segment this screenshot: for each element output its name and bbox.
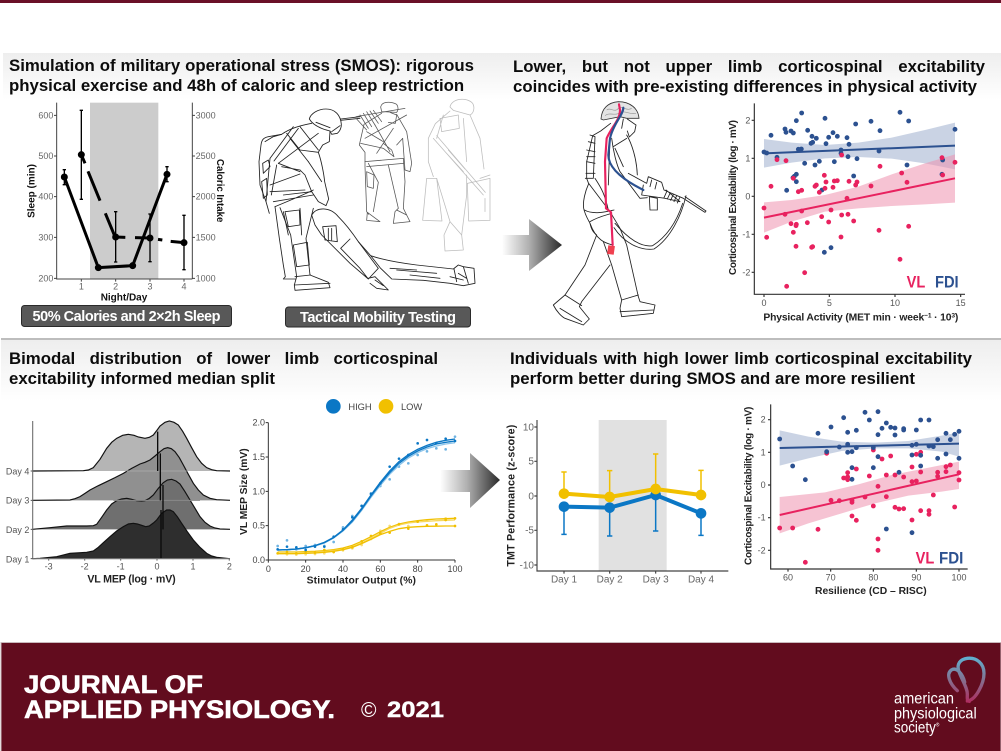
chart: excitability vs physical activity: 0 xyxy=(745,191,750,201)
chart: excitability vs physical activity: 15 xyxy=(956,298,966,308)
chart: excitability vs resilience: 90 xyxy=(911,573,921,583)
journal name: JOURNAL OF xyxy=(24,671,203,699)
chart: stimulus response curves: 1.0 xyxy=(252,486,265,496)
arrow: to right panel xyxy=(502,219,562,271)
footer panel xyxy=(1,642,1001,751)
chart: ridgeline of VL MEP: 2 xyxy=(227,561,232,571)
chart: ridgeline of VL MEP: Day 2 xyxy=(6,525,29,535)
chart: TMT performance: 0 xyxy=(528,491,534,502)
illustration: soldier carrying jerry cans xyxy=(423,99,490,251)
chart: excitability vs resilience: 70 xyxy=(826,573,836,583)
chart: stimulus response curves: 80 xyxy=(413,564,423,574)
chart: excitability vs physical activity: 2 xyxy=(745,115,750,125)
illustration: soldier standing xyxy=(356,102,412,223)
chart: ridgeline of VL MEP: -1 xyxy=(117,561,125,571)
chart: stimulus response curves: 60 xyxy=(375,564,385,574)
chart: stimulus response curves: 1.5 xyxy=(252,452,265,462)
heading: individuals with high excitability xyxy=(510,349,972,388)
chart: sleep and caloric intake: 2500 xyxy=(196,151,216,161)
copyright: 2021 xyxy=(387,697,444,722)
label: tactical mobility testing: Tactical Mobility Testing xyxy=(300,310,456,326)
chart: stimulus response curves: 0.0 xyxy=(252,555,265,565)
chart: ridgeline of VL MEP: Day 1 xyxy=(6,554,29,564)
chart: excitability vs physical activity: FDI xyxy=(935,273,959,292)
society logo: society xyxy=(894,720,942,737)
chart: excitability vs resilience: -1 xyxy=(758,513,766,523)
chart: stimulus response curves: 40 xyxy=(338,564,348,574)
chart: sleep and caloric intake xyxy=(27,103,225,303)
society logo: ® xyxy=(936,722,939,729)
points: FDI xyxy=(780,412,959,533)
chart: TMT performance: -5 xyxy=(525,526,534,537)
copyright: © xyxy=(361,699,377,722)
chart: TMT performance: 10 xyxy=(523,422,534,433)
chart: sleep and caloric intake: Sleep (min) xyxy=(27,164,38,218)
heading: bimodal distribution: Bimodal distribution of lower limb corticospinal xyxy=(9,349,438,368)
chart: excitability vs physical activity: -1 xyxy=(742,229,750,239)
chart: ridgeline of VL MEP xyxy=(6,421,232,586)
society logo xyxy=(894,658,984,737)
chart: sleep and caloric intake: 300 xyxy=(38,232,53,242)
journal name xyxy=(24,671,335,724)
legend: LOW xyxy=(401,402,422,412)
chart: stimulus response curves: 2.0 xyxy=(252,418,265,428)
journal name: APPLIED PHYSIOLOGY. xyxy=(24,696,335,724)
chart: sleep and caloric intake: 600 xyxy=(38,110,53,120)
legend: HIGH xyxy=(348,402,372,412)
chart: excitability vs physical activity: · 10 xyxy=(931,313,952,324)
chart: excitability vs resilience: 80 xyxy=(868,573,878,583)
chart: TMT performance: Day 4 xyxy=(688,575,714,586)
section divider and band: bottom xyxy=(1,338,1001,401)
points: VL xyxy=(764,155,955,286)
heading: individuals with high excitability: perform better during SMOS and are more resilient xyxy=(510,369,915,388)
chart: sleep and caloric intake: Night/Day xyxy=(101,292,148,303)
chart: excitability vs physical activity xyxy=(728,103,966,324)
chart: excitability vs resilience xyxy=(744,404,968,597)
heading: lower limb excitability xyxy=(513,57,985,96)
illustration: soldier walking with corticospinal tract xyxy=(553,102,706,325)
illustration: soldier dragging casualty xyxy=(259,109,475,290)
chart: excitability vs physical activity: Corticospinal Excitability (log · mV) xyxy=(728,120,739,275)
chart: sleep and caloric intake: 3 xyxy=(147,281,152,291)
chart: sleep and caloric intake: 4 xyxy=(181,281,186,291)
chart: excitability vs resilience: 100 xyxy=(951,573,966,583)
chart: excitability vs physical activity: 5 xyxy=(827,298,832,308)
chart: TMT performance: -10 xyxy=(520,560,534,571)
heading: lower limb excitability: coincides with pre-existing differences in physical activity xyxy=(513,77,977,96)
heading: individuals with high excitability: Individuals with high lower limb corticospinal excitability xyxy=(510,349,972,368)
society logo: physiological xyxy=(894,705,977,722)
heading: bimodal distribution xyxy=(9,349,438,388)
chart: sleep and caloric intake: 1500 xyxy=(196,232,216,242)
heading: lower limb excitability: Lower, but not upper limb corticospinal excitability xyxy=(513,57,985,76)
chart: excitability vs resilience: 60 xyxy=(783,573,793,583)
chart: sleep and caloric intake: 1000 xyxy=(196,273,216,283)
chart: stimulus response curves: 20 xyxy=(301,564,311,574)
heading: SMOS xyxy=(9,56,474,95)
header band: top left xyxy=(3,53,500,100)
heading: bimodal distribution: excitability informed median split xyxy=(9,369,275,388)
chart: ridgeline of VL MEP: Day 3 xyxy=(6,496,29,506)
chart: excitability vs physical activity: ) xyxy=(955,313,958,324)
label: 50% calories and sleep xyxy=(22,306,232,326)
copyright xyxy=(361,697,444,722)
chart: sleep and caloric intake: 2 xyxy=(113,281,118,291)
chart: excitability vs resilience: Corticospinal Excitability (log · mV) xyxy=(744,407,755,565)
chart: excitability vs physical activity: 10 xyxy=(890,298,900,308)
legend xyxy=(326,399,422,414)
chart: sleep and caloric intake: 3000 xyxy=(196,110,216,120)
chart: TMT performance: Day 1 xyxy=(551,575,577,586)
chart: ridgeline of VL MEP: -2 xyxy=(81,561,89,571)
chart: sleep and caloric intake: 2000 xyxy=(196,192,216,202)
chart: TMT performance: 5 xyxy=(528,457,534,468)
top rule xyxy=(0,0,1001,3)
chart: sleep and caloric intake: 400 xyxy=(38,192,53,202)
chart: TMT performance: Day 3 xyxy=(643,575,669,586)
chart: excitability vs resilience: FDI xyxy=(939,548,963,567)
chart: excitability vs resilience: 2 xyxy=(761,415,766,425)
chart: TMT performance xyxy=(506,420,728,586)
points: FDI xyxy=(764,112,955,252)
arrow: to lower right panel xyxy=(440,453,500,508)
chart: stimulus response curves: Stimulator Output (%) xyxy=(307,575,416,586)
chart: ridgeline of VL MEP: 0 xyxy=(154,561,159,571)
chart: excitability vs physical activity: VL xyxy=(907,273,925,292)
chart: excitability vs resilience: 0 xyxy=(761,480,766,490)
chart: excitability vs resilience: 1 xyxy=(761,447,766,457)
chart: stimulus response curves: 0 xyxy=(266,564,271,574)
heading: SMOS: physical exercise and 48h of caloric and sleep restriction xyxy=(9,76,464,95)
header band: top right xyxy=(500,53,1001,100)
chart: excitability vs resilience: Resilience (CD – RISC) xyxy=(815,586,927,597)
chart: stimulus response curves: 100 xyxy=(447,564,462,574)
label: 50% calories and sleep: 50% Calories and 2×2h Sleep xyxy=(32,309,221,325)
chart: excitability vs physical activity: Physical Activity (MET min · week xyxy=(763,313,924,324)
points: VL xyxy=(780,450,959,562)
chart: excitability vs physical activity: −1 xyxy=(924,312,932,319)
chart: excitability vs physical activity: 0 xyxy=(761,298,766,308)
chart: excitability vs physical activity: 3 xyxy=(951,312,955,319)
chart: sleep and caloric intake: Caloric Intake xyxy=(214,159,225,223)
chart: sleep and caloric intake: 200 xyxy=(38,273,53,283)
chart: excitability vs resilience: -2 xyxy=(758,545,766,555)
chart: ridgeline of VL MEP: -3 xyxy=(45,561,53,571)
chart: excitability vs physical activity: -2 xyxy=(742,267,750,277)
chart: ridgeline of VL MEP: VL MEP (log · mV) xyxy=(87,574,176,586)
chart: TMT performance: Day 2 xyxy=(597,575,623,586)
chart: ridgeline of VL MEP: 1 xyxy=(190,561,195,571)
label: tactical mobility testing xyxy=(286,307,470,327)
chart: excitability vs resilience: VL xyxy=(916,548,934,567)
society logo: american xyxy=(894,690,954,707)
chart: stimulus response curves: 0.5 xyxy=(252,521,265,531)
chart: excitability vs physical activity: 1 xyxy=(745,153,750,163)
chart: sleep and caloric intake: 1 xyxy=(79,281,84,291)
chart: stimulus response curves xyxy=(239,399,462,586)
chart: stimulus response curves: VL MEP Size (mV) xyxy=(239,448,250,535)
heading: SMOS: Simulation of military operational stress (SMOS): rigorous xyxy=(9,56,474,75)
chart: TMT performance: TMT Performance (z-score) xyxy=(506,424,518,567)
chart: ridgeline of VL MEP: Day 4 xyxy=(6,467,29,477)
chart: sleep and caloric intake: 500 xyxy=(38,151,53,161)
